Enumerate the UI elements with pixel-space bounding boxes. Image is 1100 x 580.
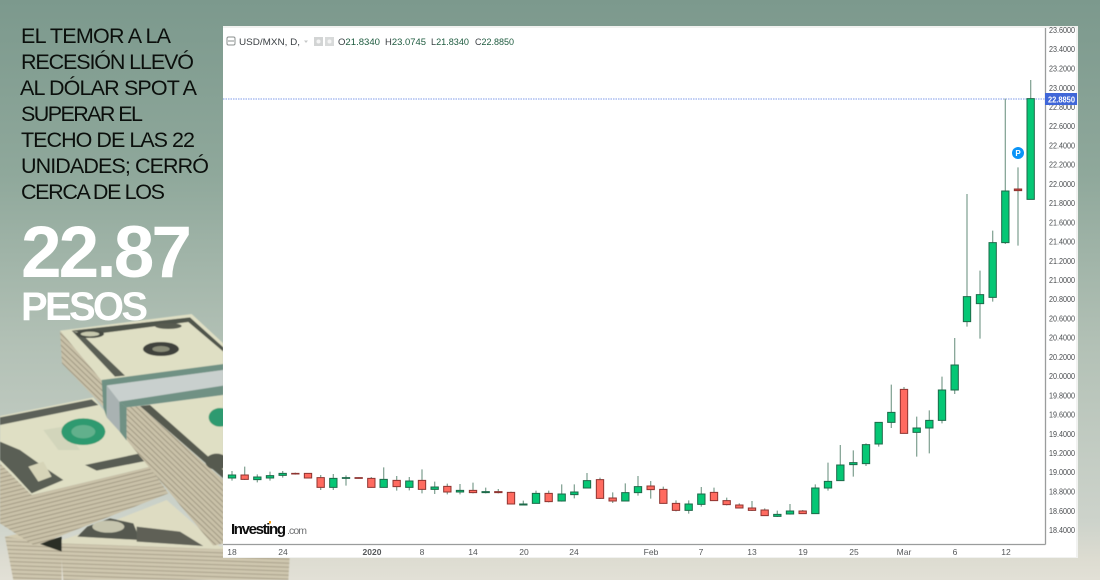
- y axis price labels: 22.6000: [1049, 121, 1075, 131]
- y axis price labels: 18.4000: [1049, 525, 1075, 535]
- icon: P badge: P: [1015, 149, 1021, 158]
- x axis date labels: 19: [798, 547, 808, 557]
- x axis date labels: Mar: [897, 547, 911, 557]
- x axis date labels: 7: [699, 547, 704, 557]
- paper band: [102, 364, 223, 386]
- y axis price labels: 19.8000: [1049, 390, 1075, 400]
- headline text: SUPERAR EL: [21, 102, 143, 126]
- x axis date labels: 6: [953, 547, 958, 557]
- y axis price labels: 23.6000: [1049, 25, 1075, 35]
- y axis price labels: 23.2000: [1049, 64, 1075, 74]
- headline text: AL DÓLAR SPOT A: [20, 75, 198, 100]
- chart header: symbol and OHLC: O21.8340: [338, 37, 380, 47]
- candlesticks: March spike: [963, 80, 1034, 339]
- chart axes: [223, 28, 1046, 544]
- small back stack: [5, 530, 62, 580]
- y axis price labels: 19.4000: [1049, 429, 1075, 439]
- candlesticks: late February to early March: [812, 338, 958, 514]
- y axis price labels: 20.8000: [1049, 294, 1075, 304]
- headline text: EL TEMOR A LA: [21, 24, 172, 48]
- y axis price labels: 23.0000: [1049, 83, 1075, 93]
- y axis price labels: 19.6000: [1049, 410, 1075, 420]
- y axis price labels: 19.0000: [1049, 467, 1075, 477]
- y axis price labels: 22.2000: [1049, 160, 1075, 170]
- y axis price labels: [1049, 25, 1075, 535]
- y axis price labels: 20.0000: [1049, 371, 1075, 381]
- y axis price labels: 22.8000: [1049, 102, 1075, 112]
- chart header: symbol and OHLC: C22.8850: [475, 37, 514, 47]
- image: stacks of dollar bills: [0, 314, 290, 580]
- bottom stack: [38, 500, 290, 580]
- x axis date labels: 20: [519, 547, 529, 557]
- candlesticks: late January to mid February: [520, 473, 806, 517]
- x axis date labels: 24: [278, 547, 288, 557]
- x axis date labels: [227, 547, 1011, 557]
- headline text: CERCA DE LOS: [21, 180, 165, 204]
- chart header: symbol and OHLC: [227, 37, 514, 47]
- x axis date labels: Feb: [644, 547, 659, 557]
- y axis price labels: 18.8000: [1049, 486, 1075, 496]
- x axis date labels: 18: [227, 547, 237, 557]
- headline text: UNIDADES; CERRÓ: [21, 153, 209, 178]
- x axis date labels: 25: [849, 547, 859, 557]
- y axis price labels: 23.4000: [1049, 44, 1075, 54]
- upper stack: [60, 314, 231, 546]
- y axis price labels: 20.2000: [1049, 352, 1075, 362]
- x axis date labels: 24: [569, 547, 579, 557]
- current price line: [223, 98, 1045, 100]
- candlesticks: December to mid January: [228, 467, 515, 504]
- current price tag: 22.8850: [1048, 94, 1075, 104]
- Investing.com logo: .com: [287, 525, 307, 537]
- x axis date labels: 2020: [363, 547, 382, 557]
- x axis date labels: 13: [747, 547, 757, 557]
- panel: USD/MXN candlestick chart: [223, 25, 1078, 558]
- left stack: [0, 397, 168, 546]
- stack lower half: [127, 406, 223, 546]
- y axis price labels: 18.6000: [1049, 506, 1075, 516]
- x axis date labels: 8: [420, 547, 425, 557]
- headline text: [20, 24, 209, 204]
- y axis price labels: 22.4000: [1049, 140, 1075, 150]
- chart header: symbol and OHLC: H23.0745: [385, 37, 426, 47]
- y axis price labels: 21.8000: [1049, 198, 1075, 208]
- y axis price labels: 19.2000: [1049, 448, 1075, 458]
- y axis price labels: 21.0000: [1049, 275, 1075, 285]
- icon: P badge: [1012, 147, 1024, 159]
- y axis price labels: 22.0000: [1049, 179, 1075, 189]
- chart header: symbol and OHLC: L21.8340: [431, 37, 469, 47]
- y axis price labels: 21.6000: [1049, 218, 1075, 228]
- y axis price labels: 20.6000: [1049, 314, 1075, 324]
- green seal: [61, 418, 105, 445]
- x axis date labels: 14: [468, 547, 478, 557]
- y axis price labels: 20.4000: [1049, 332, 1075, 342]
- Investing.com logo: Investing: [231, 521, 286, 538]
- y axis price labels: 21.4000: [1049, 236, 1075, 246]
- headline text: RECESIÓN LLEVÓ: [21, 49, 194, 74]
- unit: pesos: PESOS: [21, 285, 148, 329]
- headline text: TECHO DE LAS 22: [21, 128, 195, 152]
- chart header: symbol and OHLC: USD/MXN, D,: [239, 37, 300, 47]
- big value 22.87: 22.87: [21, 212, 192, 293]
- y axis price labels: 21.2000: [1049, 256, 1075, 266]
- x axis date labels: 12: [1001, 547, 1011, 557]
